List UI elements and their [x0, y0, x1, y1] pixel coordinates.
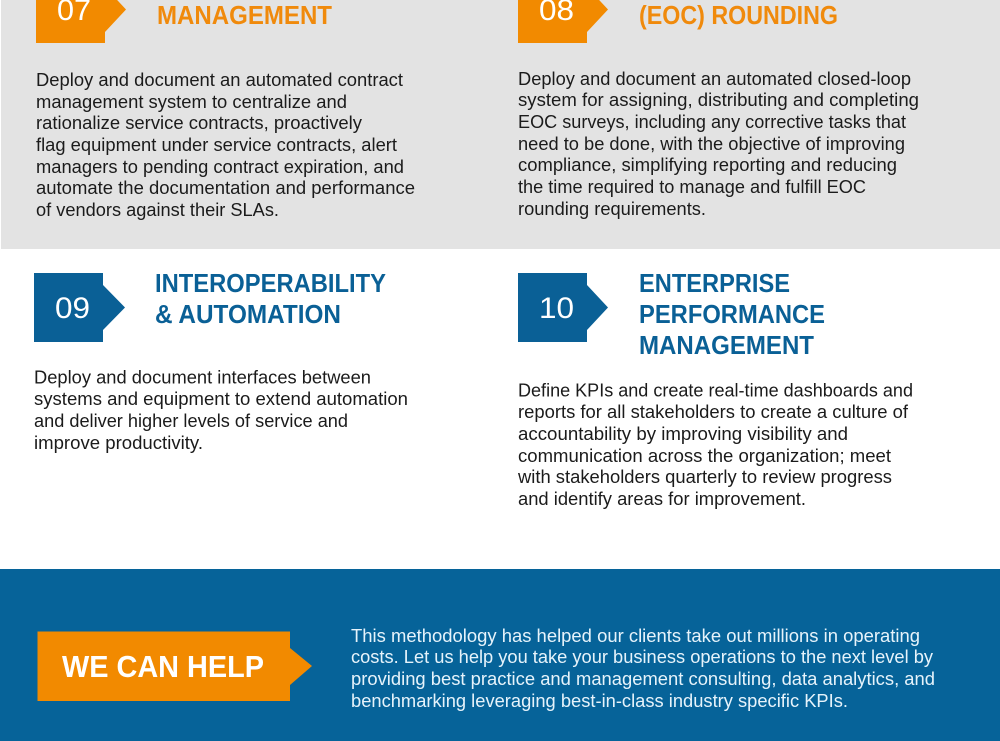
section 10: enterprise performance management — [517, 268, 913, 509]
text block 08: system for assigning, distributing and completing — [518, 89, 919, 110]
text block 07: managers to pending contract expiration, and — [36, 156, 404, 177]
callout: we can help: WE CAN HELP — [62, 649, 264, 684]
heading 10: ENTERPRISE — [639, 268, 790, 298]
text block 10: communication across the organization; meet — [518, 445, 891, 466]
text block 09: improve productivity. — [34, 432, 203, 453]
text block 07: flag equipment under service contracts, alert — [36, 134, 397, 155]
icon: badge 10 — [518, 273, 608, 342]
text block 07: automate the documentation and performance — [36, 177, 415, 198]
text block 08: rounding requirements. — [518, 198, 706, 219]
section 08: EOC rounding — [518, 0, 919, 219]
text block 07: rationalize service contracts, proactively — [36, 112, 363, 133]
text block 10 — [517, 380, 913, 509]
text block 10: with stakeholders quarterly to review progress — [517, 466, 892, 487]
text block: methodology summary: benchmarking leveraging best-in-class industry specific KPIs. — [351, 690, 848, 711]
text block 08: EOC surveys, including any corrective tasks that — [518, 111, 906, 132]
heading 10: PERFORMANCE — [639, 299, 825, 329]
heading 07: MANAGEMENT — [157, 0, 332, 30]
text block 10: accountability by improving visibility and — [518, 423, 848, 444]
icon: badge 09: 09 — [55, 292, 90, 325]
text block: methodology summary — [351, 625, 935, 711]
heading 09: INTEROPERABILITY — [155, 268, 386, 298]
icon: badge 10: 10 — [539, 292, 574, 325]
text block 07: Deploy and document an automated contract — [36, 69, 403, 90]
icon: badge 08 — [518, 0, 608, 43]
icon: badge 07 — [36, 0, 126, 43]
icon: badge 09 — [34, 273, 125, 342]
text block 09: Deploy and document interfaces between — [34, 366, 371, 388]
panel: contract management and EOC rounding — [1, 0, 1000, 249]
text block 08: Deploy and document an automated closed-loop — [518, 68, 911, 89]
heading 10: MANAGEMENT — [639, 330, 814, 360]
text block 09: systems and equipment to extend automation — [34, 388, 408, 409]
text block 09 — [34, 366, 408, 453]
text block: methodology summary: costs. Let us help you take your business operations to the next level by — [351, 646, 934, 667]
text block 10: reports for all stakeholders to create a culture of — [518, 401, 909, 422]
heading 08: (EOC) ROUNDING — [639, 0, 838, 30]
text block 07: management system to centralize and — [36, 91, 347, 112]
text block 09: and deliver higher levels of service and — [34, 410, 348, 431]
text block 08: the time required to manage and fulfill EOC — [518, 176, 866, 197]
heading 09 — [155, 268, 386, 329]
text block 08: need to be done, with the objective of improving — [518, 133, 905, 154]
section 07: contract management — [36, 0, 415, 220]
callout: we can help — [38, 632, 312, 701]
heading 09: & AUTOMATION — [155, 299, 341, 329]
text block: methodology summary: This methodology has helped our clients take out millions in operating — [351, 625, 920, 646]
text block 08 — [518, 68, 919, 219]
text block 08: compliance, simplifying reporting and reducing — [518, 154, 897, 175]
heading 10 — [639, 268, 825, 360]
text block 10: Define KPIs and create real-time dashboards and — [518, 380, 913, 400]
text block 10: and identify areas for improvement. — [518, 488, 806, 509]
text block 07: of vendors against their SLAs. — [36, 199, 279, 220]
panel: we can help footer — [0, 569, 1000, 741]
text block: methodology summary: providing best practice and management consulting, data analytics, and — [351, 668, 935, 689]
text block 07 — [36, 69, 415, 220]
section 09: interoperability and automation — [34, 268, 408, 453]
